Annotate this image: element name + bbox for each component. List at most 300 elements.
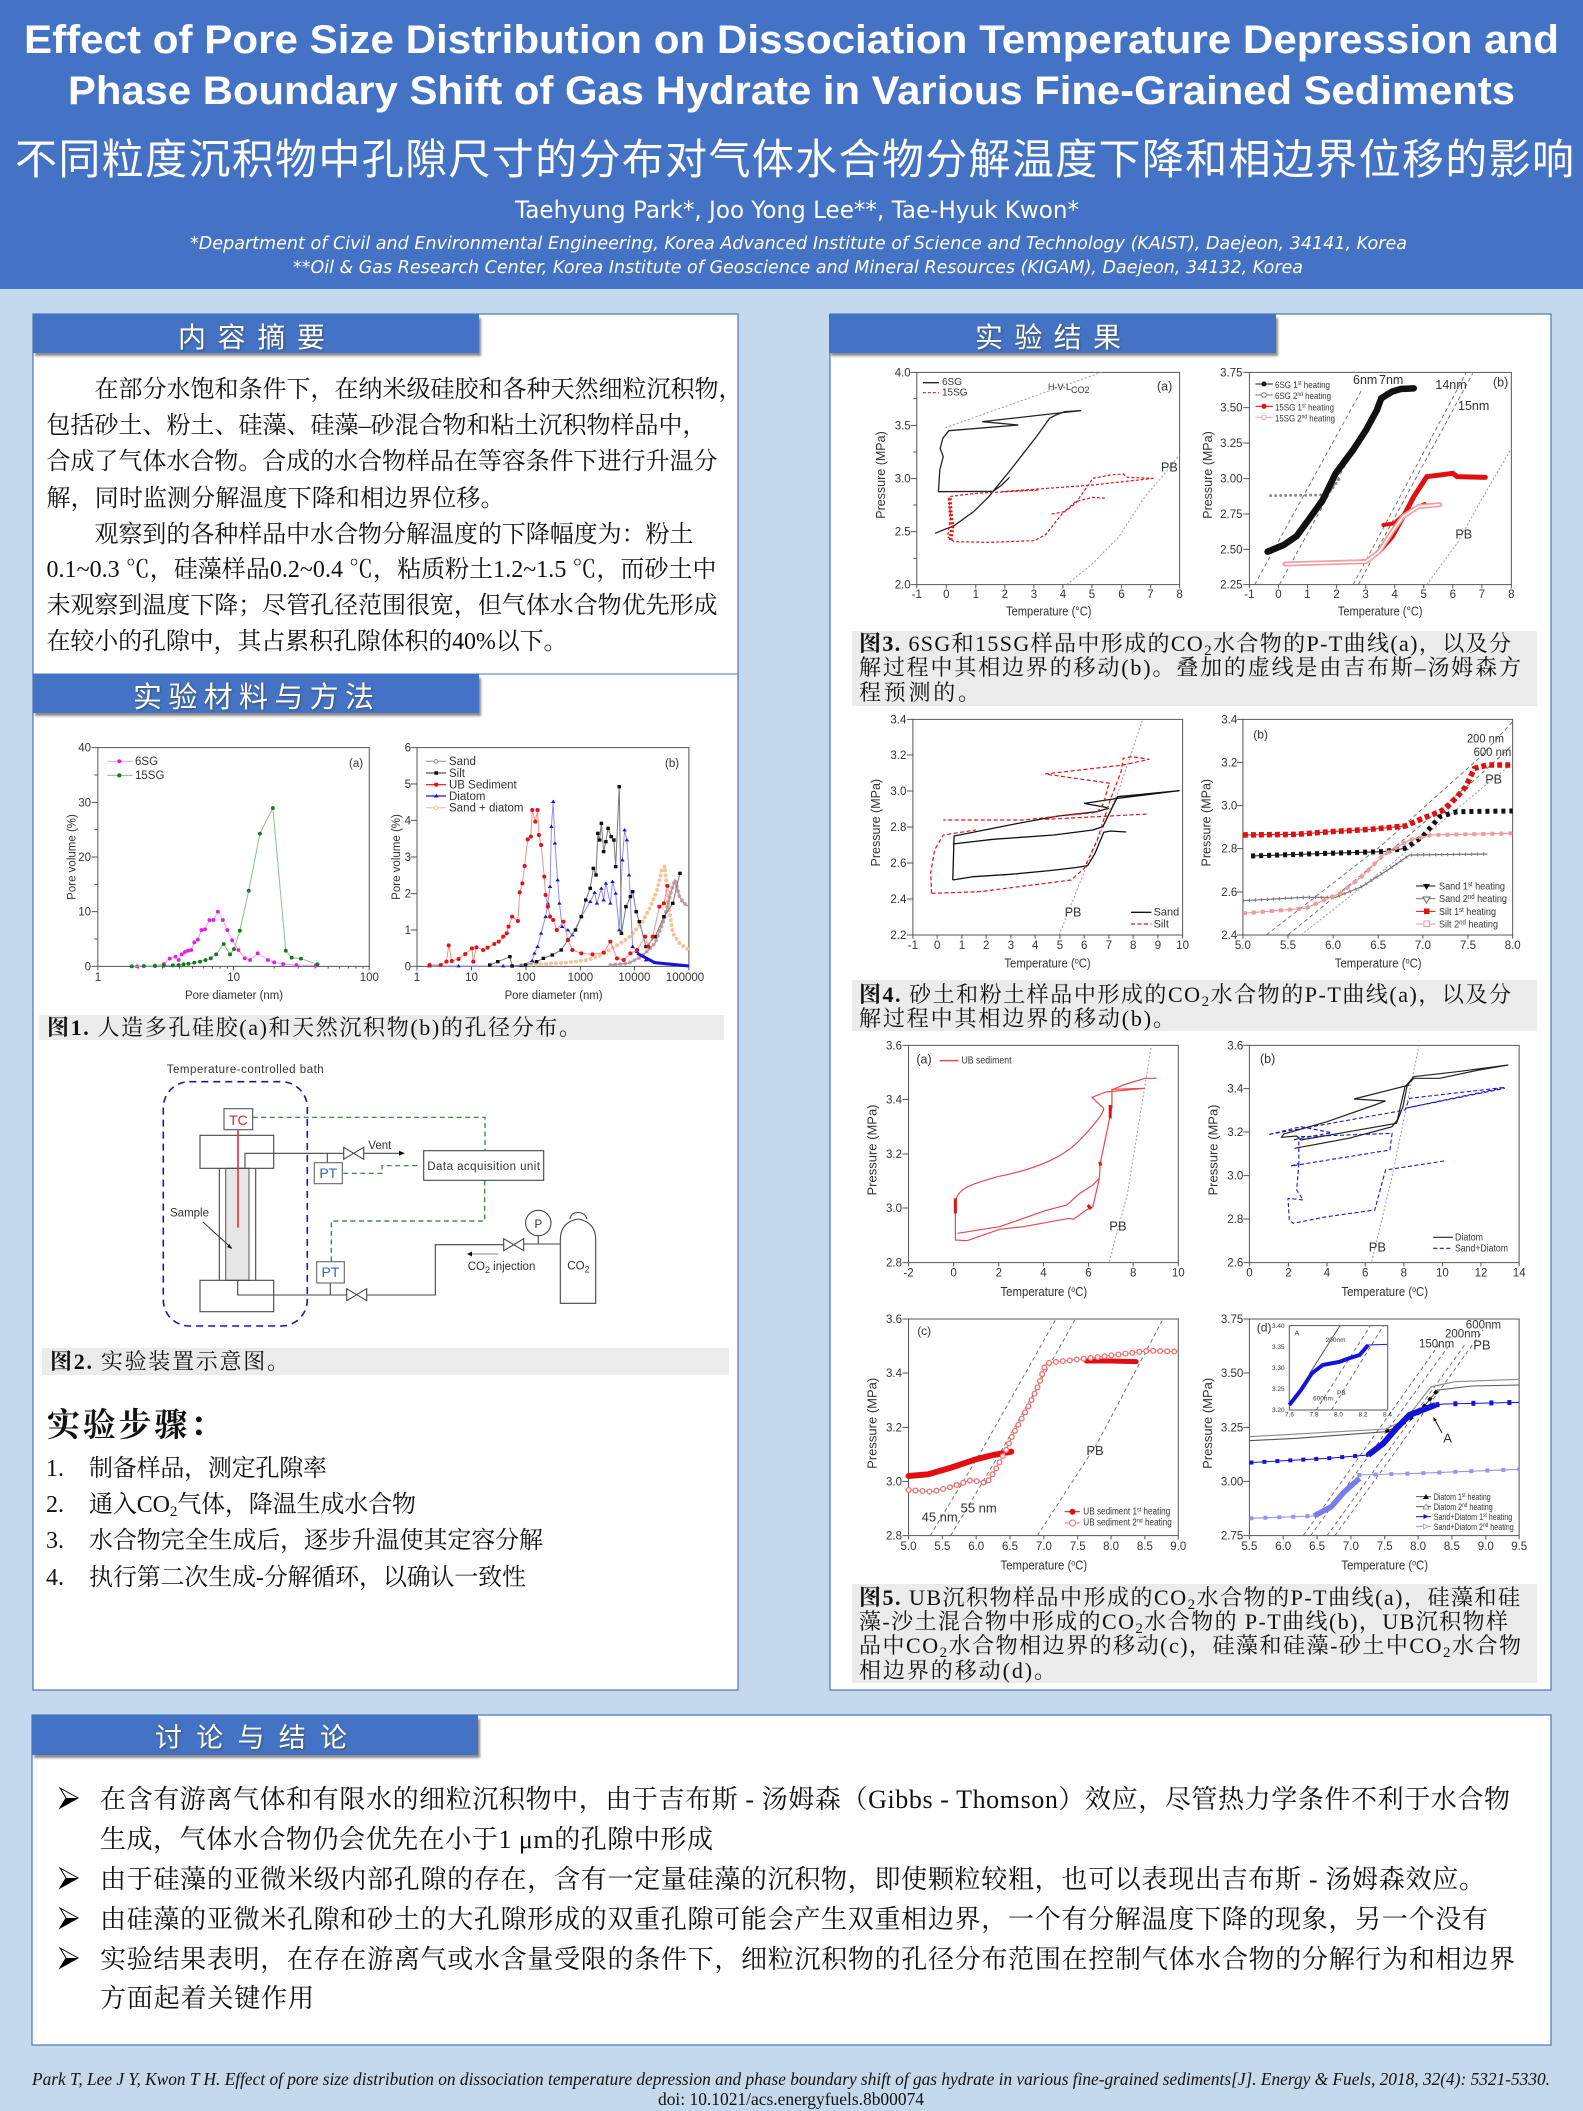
text block: abstract: 合成了气体水合物。合成的水合物样品在等容条件下进行升温分 [46, 448, 718, 475]
chart: figure 4b phase boundary shift: 7.5 [1460, 940, 1476, 952]
text block: conclusions: 生成，气体水合物仍会优先在小于1 μm的孔隙中形成 [100, 1825, 713, 1854]
chart: figure 5c UB sediment phase boundary: 6.0 [968, 1541, 984, 1553]
chart: figure 3b phase boundary shift: PB [1455, 528, 1472, 542]
data acquisition unit [424, 1151, 544, 1180]
chart: figure 4b phase boundary shift: 200 nm [1467, 732, 1504, 746]
pressure transducer lower [317, 1262, 344, 1283]
chart: figure 4a P-T curve: 2.6 [890, 858, 906, 870]
chart: figure 5c UB sediment phase boundary: 3.4 [886, 1368, 903, 1380]
chart: figure 4a P-T curve: 3 [1008, 940, 1014, 952]
chart: figure 4b phase boundary shift: PB [1485, 772, 1502, 786]
chart: figure 4b phase boundary shift: Temperature ( [1335, 957, 1413, 971]
chart: figure 5d diatom phase boundary [1200, 1314, 1527, 1572]
text block: conclusions: 方面起着关键作用 [100, 1984, 314, 2013]
chart: figure 4b phase boundary shift: 2.6 [1221, 887, 1237, 899]
chart: figure 5d diatom phase boundary: C) [1416, 1557, 1428, 1572]
chart: figure 5a UB sediment P-T curve: 3.4 [886, 1094, 903, 1106]
caption: figure 5: 水合物的 P-T曲线(b)，UB沉积物样 [1144, 1609, 1508, 1635]
caption: figure 5: 品中CO [859, 1633, 938, 1658]
chart: figure 3b phase boundary shift: 5 [1420, 589, 1427, 601]
chart: figure 5c UB sediment phase boundary: 8.5 [1137, 1541, 1153, 1553]
chart: figure 3b phase boundary shift: 2.75 [1220, 509, 1242, 521]
chart: figure 5b diatom P-T curve: Diatom [1455, 1231, 1483, 1243]
chart: figure 5d diatom phase boundary: 8.5 [1444, 1541, 1460, 1553]
chart: figure 5b diatom P-T curve: Temperature ( [1341, 1284, 1422, 1299]
chart: figure 5d diatom phase boundary: 3.25 [1272, 1386, 1285, 1393]
text block: conclusions [100, 1785, 1515, 2013]
chart: figure 5a UB sediment P-T curve: 0 [950, 1268, 957, 1280]
chart: figure 1b pore size natural sediments: Sand + diatom [449, 803, 523, 815]
chart: figure 5c UB sediment phase boundary: 6.5 [1002, 1541, 1018, 1553]
chart: figure 4b phase boundary shift: 2.8 [1221, 844, 1237, 856]
chart: figure 5b diatom P-T curve: 3.6 [1227, 1040, 1243, 1052]
chart: figure 5b diatom P-T curve: 3.0 [1227, 1171, 1243, 1183]
chart: figure 4b phase boundary shift: C) [1410, 957, 1422, 971]
list: experimental steps: 制备样品，测定孔隙率 [89, 1455, 327, 1482]
chart: figure 5d diatom phase boundary: nd [1483, 1523, 1488, 1529]
chart: figure 1a pore size silica gel: 15SG [135, 770, 164, 782]
chart: figure 5b diatom P-T curve: 6 [1362, 1268, 1368, 1280]
chart: figure 3a P-T curve: Temperature (°C) [1006, 605, 1092, 619]
title: English line 2: Phase Boundary Shift of Gas Hydrate in Various Fine-Grained Sediments [68, 69, 1515, 113]
chart: figure 4b phase boundary shift: 3.4 [1221, 714, 1238, 726]
affiliation 2: **Oil & Gas Research Center, Korea Institute of Geoscience and Mineral Resources (KIGAM), Daejeon, 34132, Korea [293, 257, 1303, 278]
chart: figure 5c UB sediment phase boundary: Temperature ( [1000, 1557, 1081, 1572]
pressure gauge [526, 1210, 551, 1236]
chart: figure 4b phase boundary shift: Sand 1 [1439, 880, 1472, 892]
chart: figure 3a P-T curve: 4 [1060, 589, 1067, 601]
chart: figure 3b phase boundary shift [1201, 367, 1515, 619]
chart: figure 4b phase boundary shift: Pressure (MPa) [1200, 779, 1214, 866]
gas lines [238, 1153, 560, 1295]
chart: figure 5b diatom P-T curve: Pressure (MPa) [1205, 1104, 1220, 1196]
heading: abstract [33, 314, 481, 356]
chart: figure 4a P-T curve: 1 [959, 940, 965, 952]
chart: figure 4a P-T curve: 0 [934, 940, 940, 952]
CO2 injection label and arrow [467, 1252, 535, 1275]
chart: figure 3a P-T curve [874, 367, 1183, 619]
CO2 cylinder [560, 1212, 596, 1303]
sample label with arrow [170, 1208, 232, 1249]
chart: figure 4a P-T curve: 2.2 [890, 930, 906, 942]
chart: figure 1b pore size natural sediments: Silt [449, 768, 466, 780]
sample column [200, 1130, 274, 1312]
chart: figure 5d diatom phase boundary: 8.2 [1358, 1412, 1368, 1418]
chart: figure 4b phase boundary shift: heating [1464, 906, 1496, 918]
chart: figure 3a P-T curve: Pressure (MPa) [874, 431, 888, 519]
chart: figure 1b pore size natural sediments: 1 [414, 972, 420, 984]
chart: figure 5c UB sediment phase boundary: nd [1137, 1518, 1143, 1525]
chart: figure 5c UB sediment phase boundary: 55 nm [961, 1501, 997, 1516]
caption: figure 4 [852, 980, 1537, 1031]
chart: figure 5a UB sediment P-T curve: Pressure (MPa) [864, 1104, 880, 1196]
text block: abstract [46, 376, 742, 655]
chart: figure 4b phase boundary shift: 600 nm [1474, 745, 1511, 759]
chart: figure 4a P-T curve: 6 [1081, 940, 1087, 952]
chart: figure 5c UB sediment phase boundary: 3.0 [886, 1476, 902, 1488]
text block: conclusions: 实验结果表明，在存在游离气或水含量受限的条件下，细粒沉积物的孔径分布范围在控制气体水合物的分解行为和相边界 [100, 1945, 1515, 1974]
chart: figure 4b phase boundary shift: 6.0 [1325, 940, 1341, 952]
chart: figure 4b phase boundary shift: heating [1473, 880, 1505, 892]
chart: figure 4a P-T curve [869, 714, 1189, 971]
chart: figure 1b pore size natural sediments: 6 [405, 743, 411, 755]
chart: figure 3a P-T curve: -1 [912, 589, 922, 601]
chart: figure 5d diatom phase boundary: 8.0 [1410, 1541, 1426, 1553]
chart: figure 3b phase boundary shift: 7nm [1379, 373, 1403, 387]
chart: figure 5d diatom phase boundary: 7.0 [1343, 1541, 1359, 1553]
chart: figure 4a P-T curve: Pressure (MPa) [869, 779, 883, 866]
chart: figure 5d diatom phase boundary: 3.30 [1272, 1365, 1285, 1372]
text block: conclusions: 在含有游离气体和有限水的细粒沉积物中，由于吉布斯 - 汤姆森（Gibbs - Thomson）效应，尽管热力学条件不利于水合物 [100, 1785, 1510, 1814]
caption: figure 3 [852, 631, 1537, 706]
chart: figure 5d diatom phase boundary: heating [1487, 1512, 1512, 1522]
chart: figure 3b phase boundary shift: 6nm [1353, 373, 1377, 387]
caption: figure 5: 2 [1135, 1621, 1143, 1637]
text block: abstract: 观察到的各种样品中水合物分解温度的下降幅度为：粉土 [94, 521, 694, 548]
chart: figure 5a UB sediment P-T curve: (a) [916, 1052, 932, 1066]
chart: figure 5a UB sediment P-T curve: 8 [1130, 1268, 1136, 1280]
chart: figure 5c UB sediment phase boundary: 5.5 [934, 1541, 950, 1553]
chart: figure 5d diatom phase boundary: 7.6 [1285, 1412, 1294, 1418]
caption: figure 2: 图2. 实验装置示意图。 [50, 1349, 289, 1374]
text block: conclusions: 由于硅藻的亚微米级内部孔隙的存在，含有一定量硅藻的沉积物，即使颗粒较粗，也可以表现出吉布斯 - 汤姆森效应。 [100, 1865, 1485, 1894]
chart: figure 4b phase boundary shift: 3.0 [1221, 801, 1237, 813]
chart: figure 4b phase boundary shift: heating [1466, 918, 1498, 930]
chart: figure 4b phase boundary shift: st [1459, 907, 1464, 914]
chart: figure 5c UB sediment phase boundary: UB sediment 2 [1083, 1518, 1149, 1529]
chart: figure 5d diatom phase boundary: 3.25 [1221, 1422, 1243, 1434]
chart: figure 1b pore size natural sediments: Pore diameter (nm) [505, 990, 603, 1002]
diagram: figure 2 experimental apparatus [163, 1064, 596, 1326]
chart: figure 4a P-T curve: Sand [1154, 907, 1179, 919]
chart: figure 3b phase boundary shift: 2 [1333, 589, 1340, 601]
chart: figure 4a P-T curve: 9 [1155, 940, 1161, 952]
caption: figure 4: 图4. 砂土和粉土样品中形成的CO [859, 982, 1200, 1007]
chart: figure 3b phase boundary shift: heating [1307, 413, 1335, 424]
chart: figure 5c UB sediment phase boundary: o [1071, 1558, 1076, 1567]
chart: figure 4a P-T curve: PB [1065, 906, 1081, 920]
chart: figure 5a UB sediment P-T curve: 10 [1172, 1268, 1185, 1280]
chart: figure 1b pore size natural sediments: UB Sediment [449, 780, 518, 792]
chart: figure 1a pore size silica gel: 10 [227, 972, 240, 984]
chart: figure 4b phase boundary shift: 5.0 [1235, 940, 1251, 952]
chart: figure 5d diatom phase boundary: 600nm [1313, 1396, 1333, 1403]
heading: discussion and conclusions: 讨论与结论 [155, 1723, 347, 1753]
chart: figure 5d diatom phase boundary: 150nm [1419, 1339, 1454, 1351]
chart: figure 5c UB sediment phase boundary: C) [1075, 1557, 1087, 1572]
heading: materials and methods: 实验材料与方法 [133, 681, 374, 714]
chart: figure 3a P-T curve: 15SG [942, 387, 968, 398]
list: experimental steps: 4. [46, 1565, 64, 1591]
chart: figure 5c UB sediment phase boundary: 7.5 [1070, 1541, 1086, 1553]
chart: figure 5d diatom phase boundary: A [1443, 1431, 1452, 1446]
chart: figure 1a pore size silica gel: 20 [78, 852, 91, 864]
chart: figure 3b phase boundary shift: -1 [1244, 589, 1255, 601]
chart: figure 5d diatom phase boundary: A [1294, 1331, 1300, 1338]
chart: figure 5d diatom phase boundary: 7.8 [1310, 1412, 1319, 1418]
chart: figure 4b phase boundary shift: 6.5 [1370, 940, 1386, 952]
footer: citation: Park T, Lee J Y, Kwon T H. Effect of pore size distribution on dissociation temperature depression and phase boundary shift of gas hydrate in various fine-grained sediments[J]. Energy & Fuels, 2018, 32(4): 5321-5330. [31, 2069, 1550, 2090]
chart: figure 5d diatom phase boundary: 3.75 [1221, 1314, 1243, 1326]
chart: figure 3b phase boundary shift: 3.75 [1220, 367, 1242, 379]
CO2 cylinder: 2 [585, 1264, 590, 1274]
chart: figure 3b phase boundary shift: 6SG 2 [1275, 391, 1302, 402]
chart: figure 5b diatom P-T curve: PB [1369, 1240, 1386, 1255]
text block: abstract: 在部分水饱和条件下，在纳米级硅胶和各种天然细粒沉积物， [94, 376, 742, 403]
chart: figure 3a P-T curve: 1 [973, 589, 979, 601]
chart: figure 4a P-T curve: 2.8 [890, 822, 906, 834]
chart: figure 5d diatom phase boundary: 9.0 [1478, 1541, 1494, 1553]
list: experimental steps: 执行第二次生成-分解循环，以确认一致性 [89, 1564, 526, 1591]
chart: figure 3b phase boundary shift: 6 [1450, 589, 1456, 601]
chart: figure 3b phase boundary shift: 3 [1362, 589, 1369, 601]
chart: figure 1a pore size silica gel: 100 [360, 972, 379, 984]
chart: figure 3b phase boundary shift: st [1298, 381, 1302, 387]
chart: figure 1a pore size silica gel: Pore volume (%) [66, 814, 78, 900]
chart: figure 5c UB sediment phase boundary: 45 nm [922, 1510, 958, 1525]
caption: figure 5: 相边界的移动(d)。 [859, 1658, 1056, 1683]
chart: figure 5d diatom phase boundary: 200nm [1326, 1337, 1346, 1344]
chart: figure 4a P-T curve: 5 [1057, 940, 1063, 952]
pressure gauge: P [534, 1219, 542, 1231]
chart: figure 4b phase boundary shift: Silt 1 [1439, 906, 1462, 918]
chart: figure 1b pore size natural sediments: 1 [405, 925, 411, 937]
chart: figure 5a UB sediment P-T curve: 3.6 [886, 1040, 902, 1052]
chart: figure 5d diatom phase boundary: 3.00 [1221, 1476, 1243, 1488]
chart: figure 1b pore size natural sediments: 3 [405, 852, 411, 864]
chart: figure 3a P-T curve: 8 [1176, 589, 1183, 601]
chart: figure 3b phase boundary shift: 0 [1275, 589, 1282, 601]
chart: figure 5c UB sediment phase boundary [864, 1314, 1186, 1572]
chart: figure 5c UB sediment phase boundary: 2.8 [886, 1531, 902, 1543]
data signal lines [253, 1117, 485, 1262]
caption: figure 3: 解过程中其相边界的移动(b)。叠加的虚线是由吉布斯–汤姆森方 [859, 655, 1521, 680]
chart: figure 3b phase boundary shift: 2.50 [1220, 544, 1242, 556]
chart: figure 3a P-T curve: 3.0 [895, 474, 911, 486]
chart: figure 4b phase boundary shift: o [1406, 957, 1410, 966]
chart: figure 5b diatom P-T curve: 10 [1436, 1268, 1449, 1280]
chart: figure 5b diatom P-T curve: Sand+Diatom [1455, 1242, 1508, 1254]
chart: figure 5b diatom P-T curve: (b) [1260, 1052, 1275, 1066]
chart: figure 3b phase boundary shift: 3.25 [1220, 438, 1242, 450]
list: experimental steps [46, 1455, 543, 1591]
text block: abstract: 0.1~0.3 ℃，硅藻样品0.2~0.4 ℃，粘质粉土1.2~1.5 ℃，而砂土中 [46, 556, 716, 583]
chart: figure 5a UB sediment P-T curve: UB sediment [962, 1055, 1012, 1067]
chart: figure 5c UB sediment phase boundary: 5.0 [900, 1541, 916, 1553]
chart: figure 5d diatom phase boundary: 3.50 [1221, 1368, 1243, 1380]
chart: figure 5b diatom P-T curve: 2.8 [1227, 1214, 1243, 1226]
authors: Taehyung Park*, Joo Yong Lee**, Tae-Hyuk Kwon* [514, 196, 1079, 224]
chart: figure 5c UB sediment phase boundary: 8.0 [1103, 1541, 1119, 1553]
chart: figure 1a pore size silica gel: 6SG [135, 756, 158, 768]
chart: figure 4b phase boundary shift: (b) [1253, 727, 1268, 741]
panel: discussion and conclusions [32, 1715, 1551, 2045]
chart: figure 3b phase boundary shift: Temperature (°C) [1338, 605, 1422, 619]
chart: figure 5c UB sediment phase boundary: 9.0 [1170, 1541, 1186, 1553]
caption: figure 5: 水合物相边界的移动(c)，硅藻和硅藻-砂土中CO [949, 1633, 1441, 1659]
chart: figure 3b phase boundary shift: st [1302, 403, 1306, 409]
chart: figure 5d diatom phase boundary: 5.5 [1241, 1541, 1257, 1553]
chart: figure 3a P-T curve: PB [1161, 461, 1178, 475]
chart: figure 3b phase boundary shift: 15SG 1 [1275, 402, 1307, 413]
chart: figure 4a P-T curve: -1 [908, 940, 918, 952]
chart: figure 5d diatom phase boundary: Sand+Diatom 1 [1434, 1512, 1496, 1522]
chart: figure 4b phase boundary shift: Silt 2 [1439, 918, 1462, 930]
chart: figure 5d diatom phase boundary: 3.35 [1272, 1344, 1285, 1351]
chart: figure 3b phase boundary shift: 6SG 1 [1275, 380, 1302, 391]
caption: figure 5: 水合物 [1452, 1633, 1521, 1658]
chart: figure 1b pore size natural sediments [391, 743, 704, 1002]
chart: figure 1b pore size natural sediments: 100 [516, 972, 536, 984]
chart: figure 4b phase boundary shift: 2.4 [1221, 930, 1238, 942]
pressure transducer upper: PT [319, 1165, 338, 1181]
chart: figure 3a P-T curve: 3 [1031, 589, 1037, 601]
chart: figure 5d diatom phase boundary: 600nm [1466, 1319, 1501, 1331]
chart: figure 5a UB sediment P-T curve: C) [1075, 1284, 1087, 1299]
chart: figure 1a pore size silica gel: 10 [78, 907, 91, 919]
chart: figure 5d diatom phase boundary: 8.4 [1383, 1412, 1392, 1418]
chart: figure 5d diatom phase boundary: 200nm [1445, 1329, 1480, 1341]
chart: figure 4a P-T curve: 8 [1130, 940, 1136, 952]
chart: figure 5c UB sediment phase boundary: st [1137, 1506, 1141, 1513]
chart: figure 3b phase boundary shift: heating [1306, 402, 1334, 413]
chart: figure 1b pore size natural sediments: 1000 [568, 972, 593, 984]
caption: figure 4: 解过程中其相边界的移动(b)。 [859, 1006, 1175, 1031]
chart: figure 3a P-T curve: 0 [943, 589, 950, 601]
heading: materials and methods [33, 674, 481, 716]
chart: figure 5d diatom phase boundary: 6.0 [1275, 1541, 1291, 1553]
chart: figure 3b phase boundary shift: nd [1302, 414, 1307, 420]
chart: figure 5c UB sediment phase boundary: Pressure (MPa) [864, 1378, 880, 1469]
caption: figure 5: 2 [940, 1645, 947, 1661]
chart: figure 5b diatom P-T curve [1205, 1040, 1526, 1299]
chart: figure 1a pore size silica gel: 0 [85, 961, 91, 973]
chart: figure 5c UB sediment phase boundary: (c) [917, 1324, 931, 1338]
chart: figure 5a UB sediment P-T curve: 2 [996, 1268, 1002, 1280]
chart: figure 3b phase boundary shift: 3.00 [1220, 474, 1242, 486]
chart: figure 5d diatom phase boundary: 7.5 [1377, 1541, 1393, 1553]
panel: right column results [829, 314, 1551, 1690]
chart: figure 1b pore size natural sediments: 4 [405, 815, 412, 827]
caption: figure 4: 2 [1202, 994, 1209, 1010]
chart: figure 3b phase boundary shift: 15SG 2 [1275, 413, 1307, 424]
chart: figure 5b diatom P-T curve: 3.2 [1227, 1127, 1243, 1139]
chart: figure 1b pore size natural sediments: (b) [665, 758, 679, 770]
CO2 injection label and arrow: CO [468, 1261, 485, 1273]
chart: figure 5d diatom phase boundary: st [1483, 1513, 1487, 1519]
chart: figure 5c UB sediment phase boundary: heating [1143, 1518, 1172, 1529]
chart: figure 4a P-T curve: o [1075, 957, 1079, 966]
chart: figure 3b phase boundary shift: 8 [1508, 589, 1515, 601]
valves [344, 1147, 524, 1301]
chart: figure 4a P-T curve: 2 [983, 940, 989, 952]
chart: figure 3a P-T curve: 5 [1089, 589, 1095, 601]
text block: abstract: 解，同时监测分解温度下降和相边界位移。 [46, 485, 504, 512]
CO2 injection label and arrow: 2 [485, 1265, 490, 1275]
diagram: figure 2 experimental apparatus: Temperature-controlled bath [167, 1064, 324, 1076]
caption: figure 4: 水合物的P-T曲线(a)，以及分 [1211, 982, 1511, 1008]
sample label with arrow: Sample [170, 1208, 209, 1220]
title: English line 1: Effect of Pore Size Distribution on Dissociation Temperature Depression and [24, 18, 1559, 62]
heading: discussion and conclusions [32, 1715, 480, 1758]
chart: figure 3b phase boundary shift: heating [1302, 380, 1330, 391]
chart: figure 5a UB sediment P-T curve: Temperature ( [1000, 1284, 1081, 1299]
chart: figure 1a pore size silica gel: 1 [95, 972, 101, 984]
caption: figure 1: 图1. 人造多孔硅胶(a)和天然沉积物(b)的孔径分布。 [47, 1015, 581, 1040]
text block: abstract: 未观察到温度下降；尽管孔径范围很宽，但气体水合物优先形成 [46, 592, 718, 619]
list: experimental steps: 2 [170, 1504, 177, 1520]
caption: figure 2 [42, 1348, 729, 1375]
chart: figure 3a P-T curve: (a) [1157, 380, 1172, 394]
icon: bullet arrows [60, 1788, 78, 1968]
chart: figure 3b phase boundary shift: nd [1297, 392, 1303, 398]
chart: figure 4b phase boundary shift: Sand 2 [1439, 893, 1472, 905]
chart: figure 5d diatom phase boundary: 3.20 [1272, 1407, 1285, 1414]
chart: figure 3b phase boundary shift: 4 [1391, 589, 1398, 601]
chart: figure 5a UB sediment P-T curve [864, 1040, 1185, 1299]
list: experimental steps: 1. [46, 1456, 64, 1482]
chart: figure 4b phase boundary shift: heating [1475, 893, 1507, 905]
chart: figure 3a P-T curve: H-V-L [1048, 382, 1071, 392]
chart: figure 1b pore size natural sediments: 2 [405, 889, 411, 901]
chart: figure 5d diatom phase boundary: Diatom 1 [1434, 1492, 1470, 1502]
chart: figure 1b pore size natural sediments: Diatom [449, 791, 485, 803]
footer: citation: doi: 10.1021/acs.energyfuels.8b00074 [658, 2089, 924, 2109]
chart: figure 5b diatom P-T curve: 12 [1475, 1268, 1487, 1280]
title: Chinese: 不同粒度沉积物中孔隙尺寸的分布对气体水合物分解温度下降和相边界位移的影响 [15, 136, 1574, 183]
chart: figure 5c UB sediment phase boundary: UB sediment 1 [1083, 1506, 1149, 1517]
chart: figure 4b phase boundary shift: nd [1459, 920, 1466, 926]
chart: figure 4a P-T curve: 3.0 [890, 786, 906, 798]
chart: figure 5a UB sediment P-T curve: 2.8 [886, 1258, 902, 1270]
chart: figure 4a P-T curve: Temperature ( [1004, 957, 1082, 971]
chart: figure 5d diatom phase boundary: Sand+Diatom 2 [1434, 1522, 1496, 1532]
chart: figure 3a P-T curve: 6SG [942, 377, 962, 388]
chart: figure 5d diatom phase boundary: (d) [1257, 1321, 1271, 1335]
chart: figure 5b diatom P-T curve: 3.4 [1227, 1084, 1244, 1096]
chart: figure 3a P-T curve: 2.5 [895, 527, 911, 539]
list: experimental steps: 水合物完全生成后，逐步升温使其定容分解 [89, 1527, 543, 1554]
chart: figure 1b pore size natural sediments: 100000 [666, 972, 704, 984]
chart: figure 5a UB sediment P-T curve: PB [1109, 1219, 1127, 1234]
chart: figure 4a P-T curve: Silt [1154, 918, 1169, 930]
list: experimental steps: 气体，降温生成水合物 [177, 1491, 416, 1518]
chart: figure 4b phase boundary shift: st [1468, 882, 1473, 888]
chart: figure 4b phase boundary shift: 8.0 [1505, 940, 1521, 952]
chart: figure 1b pore size natural sediments: 5 [405, 779, 411, 791]
chart: figure 5d diatom phase boundary: 6.5 [1309, 1541, 1325, 1553]
chart: figure 5c UB sediment phase boundary: 7.0 [1036, 1541, 1052, 1553]
chart: figure 5b diatom P-T curve: 0 [1246, 1268, 1253, 1280]
chart: figure 3b phase boundary shift: heating [1303, 391, 1331, 402]
chart: figure 3b phase boundary shift: 7 [1479, 589, 1485, 601]
CO2 cylinder: CO [567, 1260, 585, 1272]
chart: figure 4b phase boundary shift: 5.5 [1280, 940, 1296, 952]
caption: figure 5: 2 [1443, 1645, 1450, 1661]
chart: figure 5a UB sediment P-T curve: -2 [903, 1268, 914, 1280]
chart: figure 5d diatom phase boundary: nd [1462, 1503, 1467, 1509]
chart: figure 1a pore size silica gel: 40 [78, 743, 91, 755]
chart: figure 4a P-T curve: 4 [1032, 940, 1039, 952]
caption: figure 3: 图3. 6SG和15SG样品中形成的CO [859, 631, 1203, 656]
chart: figure 3a P-T curve: 7 [1147, 589, 1154, 601]
heading: abstract: 内容摘要 [178, 322, 325, 353]
chart: figure 5b diatom P-T curve: C) [1416, 1284, 1428, 1299]
heading: experimental steps: 实验步骤： [47, 1407, 223, 1444]
pressure transducer upper [314, 1163, 342, 1184]
chart: figure 4a P-T curve: C) [1079, 957, 1091, 971]
chart: figure 3a P-T curve: 2.0 [895, 580, 911, 592]
